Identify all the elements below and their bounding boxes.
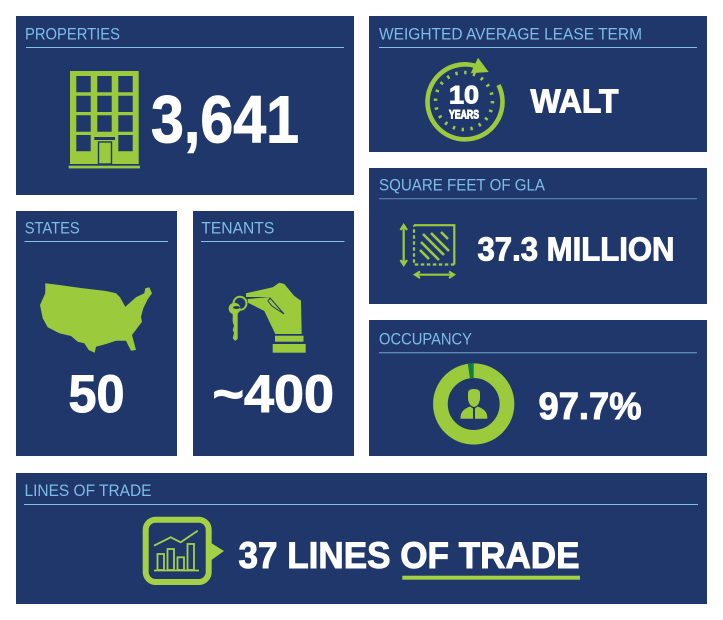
- heading: weighted average lease term: WEIGHTED AVERAGE LEASE TERM: [379, 26, 642, 44]
- panel: weighted average lease term: [369, 16, 707, 152]
- icon: bar chart speech bubble: [146, 520, 224, 582]
- icon: square footage: [400, 225, 454, 278]
- panel: states: [16, 211, 177, 456]
- value: 50: 50: [68, 365, 124, 424]
- icon: ten year clock: 10: [449, 82, 479, 110]
- heading: square feet of GLA: SQUARE FEET OF GLA: [379, 177, 545, 195]
- chart: occupancy donut: [440, 363, 507, 437]
- icon: hand holding key: [229, 283, 306, 353]
- panel: occupancy: [369, 320, 707, 456]
- value: 37 lines of trade: 37 LINES OF TRADE: [238, 534, 580, 576]
- icon: person: [460, 389, 487, 419]
- icon: USA map: [40, 283, 152, 353]
- panel: properties: [16, 16, 354, 195]
- value: 3,641: 3,641: [151, 82, 299, 158]
- heading: lines of trade: LINES OF TRADE: [24, 482, 152, 500]
- value: 97.7%: 97.7%: [538, 386, 642, 428]
- heading: occupancy: OCCUPANCY: [379, 330, 472, 348]
- heading: properties: PROPERTIES: [25, 26, 120, 44]
- icon: building: [69, 71, 140, 168]
- icon: ten year clock: [427, 58, 502, 139]
- value: 37.3 million: 37.3 MILLION: [478, 232, 674, 268]
- panel: lines of trade: [16, 473, 707, 604]
- value: WALT: WALT: [530, 82, 618, 120]
- value: ~400: ~400: [212, 365, 334, 424]
- heading: states: STATES: [25, 219, 80, 237]
- underline accent: [402, 576, 580, 580]
- heading: tenants: TENANTS: [201, 219, 274, 237]
- panel: square feet of GLA: [369, 168, 707, 304]
- icon: ten year clock: YEARS: [449, 108, 479, 122]
- panel: tenants: [193, 211, 354, 456]
